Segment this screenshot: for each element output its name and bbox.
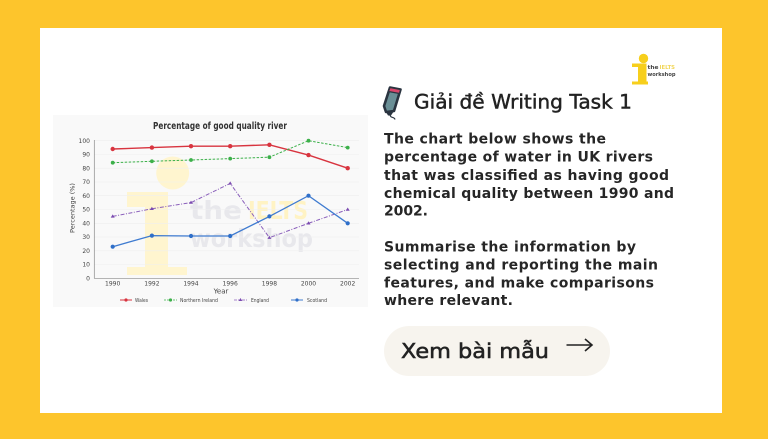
brand logo: the	[648, 65, 659, 71]
watermark logo: workshop	[190, 224, 313, 253]
y axis labels: 30	[82, 234, 90, 241]
task description paragraph: percentage of water in UK rivers	[384, 150, 653, 166]
x axis labels: 1998	[262, 281, 277, 288]
x axis labels: 1996	[223, 281, 238, 288]
y axis labels: 0	[86, 276, 90, 282]
y axis title: Percentage (%)	[68, 183, 76, 233]
task instruction paragraph: Summarise the information by	[384, 240, 636, 256]
series: England	[111, 181, 350, 239]
y axis labels: 10	[82, 262, 90, 269]
button: view sample	[384, 326, 610, 376]
white card panel	[40, 28, 722, 413]
brand logo: IELTS	[660, 65, 675, 71]
brand logo	[632, 54, 676, 84]
chart legend	[120, 298, 327, 304]
button: view sample: Xem bài mẫu	[401, 338, 549, 363]
series: Wales	[110, 143, 350, 170]
x axis labels: 2002	[340, 281, 356, 288]
y axis labels: 50	[82, 207, 90, 214]
task description paragraph: that was classified as having good	[384, 168, 669, 184]
task description paragraph: 2002.	[384, 204, 428, 220]
y axis labels: 100	[79, 138, 90, 145]
chart legend: England	[251, 298, 269, 304]
heading: Giải đề Writing Task 1	[414, 90, 632, 113]
series: Scotland	[111, 194, 350, 249]
chart legend: Wales	[135, 298, 148, 304]
task description paragraph: The chart below shows the	[384, 132, 606, 148]
x axis labels: 1992	[144, 281, 160, 288]
x axis labels: 1990	[105, 281, 121, 288]
chart panel	[53, 115, 368, 307]
y axis labels: 60	[82, 193, 90, 200]
series: Northern Ireland	[111, 139, 350, 165]
task instruction paragraph: features, and make comparisons	[384, 275, 654, 291]
task instruction paragraph: selecting and reporting the main	[384, 257, 658, 273]
chart legend: Scotland	[307, 298, 327, 304]
chart legend: Northern Ireland	[180, 298, 218, 304]
task instruction paragraph	[384, 240, 658, 309]
watermark logo: the	[190, 196, 242, 225]
y axis labels: 80	[82, 165, 90, 172]
icon: arrow	[566, 339, 592, 351]
y axis labels: 20	[82, 248, 90, 255]
y axis labels	[79, 138, 90, 282]
y axis labels: 90	[82, 152, 90, 159]
x axis labels: 1994	[183, 281, 199, 288]
chart title: Percentage of good quality river	[153, 121, 287, 132]
y axis labels: 70	[82, 179, 90, 186]
chart gridlines and axes	[94, 140, 359, 278]
x axis labels	[105, 281, 356, 288]
task instruction paragraph: where relevant.	[384, 293, 513, 309]
x axis title: Year	[213, 288, 229, 296]
task description paragraph: chemical quality between 1990 and	[384, 186, 674, 202]
watermark logo	[127, 156, 313, 275]
watermark logo: IELTS	[248, 196, 308, 225]
brand logo: workshop	[648, 72, 676, 78]
task description paragraph	[384, 132, 674, 220]
x axis labels: 2000	[301, 281, 316, 288]
y axis labels: 40	[82, 220, 90, 228]
icon: pencil	[384, 88, 400, 120]
